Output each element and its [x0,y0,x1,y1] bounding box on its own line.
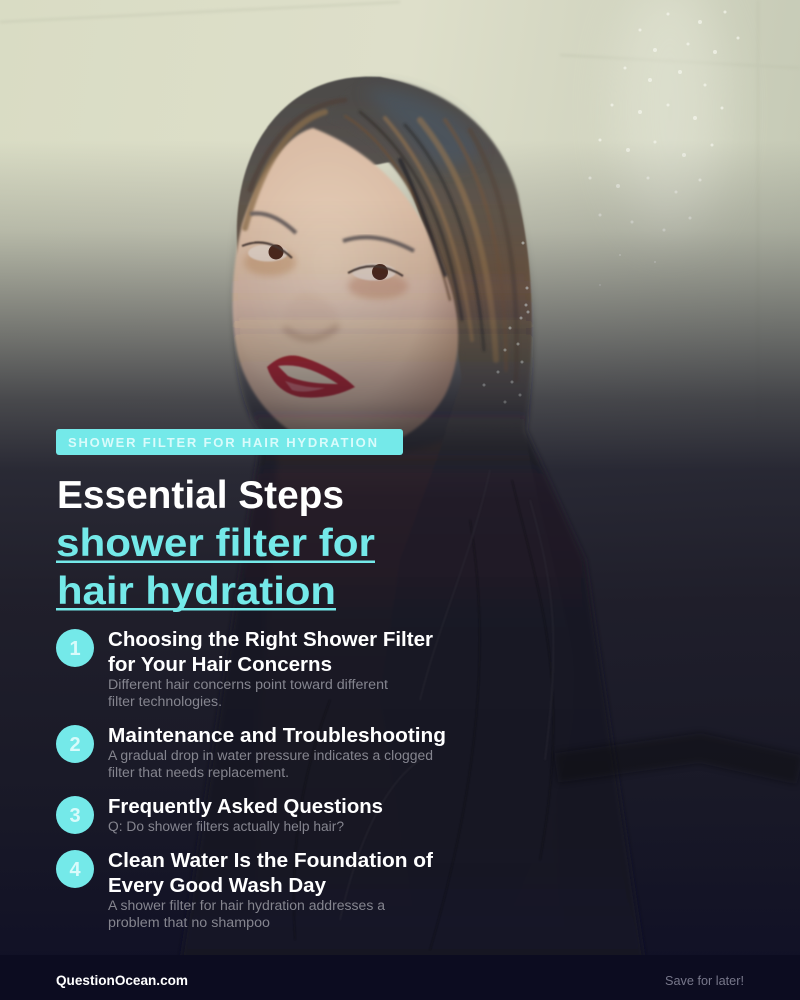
category pill: SHOWER FILTER FOR HAIR HYDRATION [68,435,377,450]
title: hair hydration [57,570,336,613]
blue sheen on crown [365,89,480,166]
lips [267,355,355,398]
footer bar: Save for later! [665,973,744,988]
footer bar: QuestionOcean.com [56,972,188,988]
brows [250,213,296,233]
water droplets [588,10,740,286]
step 1: for Your Hair Concerns [108,653,332,676]
title: Essential Steps [57,474,344,517]
step 4: problem that no shampoo [108,915,270,930]
front hair sweep [328,78,530,430]
step 2: 2 [69,734,81,756]
category pill [56,429,403,455]
droplets on hair [482,242,530,404]
step 1: 1 [69,638,81,660]
title: shower filter for [56,522,375,565]
step 4: Every Good Wash Day [108,874,327,897]
photo: woman [222,75,799,950]
eye sockets [244,248,296,276]
step 2: filter that needs replacement. [108,765,289,780]
step 3: Q: Do shower filters actually help hair? [108,819,344,834]
step 2: Maintenance and Troubleshooting [108,724,446,747]
step 1: filter technologies. [108,694,222,709]
step 3: 3 [69,805,81,827]
footer bar [0,955,800,1000]
wet strands over the chest [294,470,553,950]
step 4: A shower filter for hair hydration addresses a [108,898,386,913]
step 2: A gradual drop in water pressure indicates a clogged [108,748,433,763]
dark tile band [556,748,800,770]
silhouette shade [222,231,601,955]
step 1: Choosing the Right Shower Filter [108,628,433,651]
right eye [348,264,403,280]
face [233,128,458,451]
step 1: Different hair concerns point toward different [108,677,388,692]
step 1 [56,628,433,709]
step 4 [56,849,433,930]
title [56,474,375,613]
step 3 [56,795,383,834]
step 4: Clean Water Is the Foundation of [108,849,433,872]
nose [282,292,340,340]
hair mass [237,77,574,950]
step 3: Frequently Asked Questions [108,795,383,818]
hair strands [245,100,517,380]
left eye [242,242,292,262]
shoulder and body [250,425,570,1000]
step 2 [56,724,446,780]
step 4: 4 [69,859,81,881]
